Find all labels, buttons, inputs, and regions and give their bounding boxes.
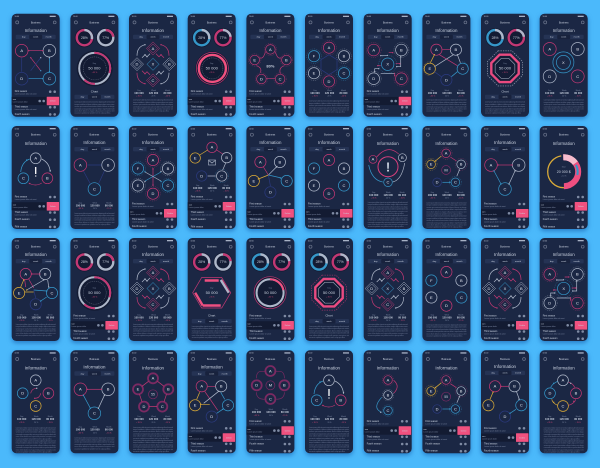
- pentagon diagram: D: [260, 76, 263, 81]
- phone row 3 column 1: star network: [12, 238, 60, 341]
- season list: [246, 420, 294, 453]
- donut chart: + 10 %: [561, 176, 567, 178]
- network diagram ABCD: [15, 44, 56, 85]
- phone row 1 column 7: circuit diagram: [364, 14, 412, 117]
- M cross diagram: [252, 366, 289, 404]
- pentagon with envelope: C: [220, 173, 223, 178]
- exclamation diagram: A: [372, 157, 375, 162]
- vertical chain diagram: C: [387, 408, 390, 413]
- phone row 4 column 2: triangle arrows: [70, 350, 118, 453]
- M cross diagram: M: [269, 383, 272, 388]
- statistics: [193, 184, 231, 192]
- triangle diagram: [74, 383, 114, 420]
- statistics: [310, 89, 348, 98]
- phone row 3 column 2: rings and big ring: [70, 238, 118, 341]
- phone row 4 column 1: ABCD cross: [12, 350, 60, 454]
- star diagram: [423, 44, 468, 86]
- pentagon with envelope: D: [200, 173, 203, 178]
- filled pentagon diagram: E: [137, 387, 140, 392]
- phone row 3 column 10: circuit diagram: [540, 238, 588, 341]
- pentagon diagram: E: [253, 57, 256, 62]
- season list: [422, 420, 470, 453]
- phone row 1 column 2: rings and big ring: [70, 14, 118, 117]
- phone row 3 column 5: rings and thick ring: [246, 238, 294, 341]
- octagon chart: [311, 275, 347, 310]
- circle diagram: X: [562, 60, 565, 65]
- phone row 4 column 5: M cross: [246, 350, 294, 453]
- statistics: [252, 408, 289, 417]
- pentagon with envelope: E: [194, 155, 197, 160]
- donut chart: [548, 156, 580, 188]
- chart footer: [192, 314, 232, 339]
- phone row 4 column 4: circuit pentagon: [188, 350, 236, 453]
- phone row 2 column 8: pentagon M: [422, 126, 470, 229]
- season list: [70, 314, 118, 340]
- percentage rings: [75, 28, 115, 47]
- M cross diagram: D: [255, 383, 258, 388]
- hexagon spoke diagram: [131, 153, 175, 201]
- network diagram ABCD: B: [48, 48, 51, 53]
- phone row 1 column 5: pentagon 80%: [246, 14, 294, 117]
- network diagram ABCD: C: [48, 76, 51, 81]
- filled pentagon diagram: D: [143, 404, 146, 409]
- circuit diagram: [542, 267, 585, 310]
- phone row 4 column 3: filled pentagon 55: [129, 350, 177, 453]
- filled pentagon diagram: 55: [151, 392, 155, 396]
- paragraph: [133, 323, 174, 337]
- filled pentagon diagram: B: [167, 387, 170, 392]
- paragraph: [426, 99, 467, 113]
- phone row 4 column 8: pentagon 55: [422, 350, 470, 453]
- statistics: [134, 415, 172, 424]
- big ring chart: [77, 50, 113, 86]
- vertical chain diagram: [377, 374, 397, 416]
- phone row 1 column 9: octagon chart: [481, 14, 529, 117]
- phone row 3 column 3: diamond network: [129, 238, 177, 341]
- network diagram ABCD: D: [20, 76, 23, 81]
- phone row 2 column 7: big exclamation circle: [364, 126, 412, 229]
- M cross diagram: A: [269, 368, 272, 373]
- filled pentagon diagram: [133, 373, 173, 412]
- cross diagram: [17, 375, 54, 411]
- paragraph: [309, 100, 350, 114]
- paragraph: [309, 426, 350, 453]
- pentagon diagram: C: [279, 76, 282, 81]
- cross diagram: D: [21, 391, 24, 396]
- cross diagram: B: [47, 391, 50, 396]
- big ring chart: [77, 275, 113, 311]
- octagon chart: [487, 51, 523, 86]
- exclamation diagram: C: [387, 180, 390, 185]
- filled pentagon diagram: C: [161, 404, 164, 409]
- circle diagram: C: [576, 74, 579, 79]
- filled pentagon diagram: A: [152, 376, 155, 381]
- paragraph: [426, 202, 467, 229]
- season list: [481, 202, 529, 228]
- circle diagram: D: [548, 74, 551, 79]
- phone row 2 column 5: hub star: [246, 126, 294, 229]
- paragraph: [368, 201, 408, 228]
- phone row 1 column 3: diamond network: [129, 14, 177, 117]
- hub diagram: [248, 156, 292, 198]
- statistics: [428, 191, 465, 200]
- circuit pentagon: [190, 381, 234, 422]
- season list: [129, 202, 177, 228]
- phone row 4 column 10: ABCD ring: [540, 350, 588, 454]
- statistics: [369, 191, 407, 200]
- diamond diagram: [130, 42, 176, 87]
- statistics: [76, 426, 113, 434]
- ABCD ring diagram: B: [575, 391, 578, 396]
- phone row 1 column 8: star diagram: [422, 14, 470, 117]
- paragraph: [133, 99, 174, 113]
- vertical chain diagram: B: [387, 392, 390, 397]
- phone row 1 column 1: ABCD network: [12, 14, 60, 117]
- phone row 2 column 1: exclamation cycle: [12, 126, 60, 229]
- phone row 2 column 9: triangle arrows: [481, 126, 529, 229]
- phone row 2 column 2: plain triangle: [70, 126, 118, 229]
- phone row 1 column 4: rings and pink ring: [188, 14, 236, 117]
- season list: [305, 202, 353, 228]
- pentagon with envelope: A: [211, 145, 214, 150]
- pentagon cycle: [483, 381, 527, 422]
- vertical chain diagram: A: [387, 377, 390, 382]
- cycle diagram: [311, 375, 346, 407]
- circle diagram: B: [576, 46, 579, 51]
- season list: [188, 427, 236, 452]
- donut chart: Start: [562, 166, 566, 168]
- ABCD ring diagram: A: [562, 378, 565, 383]
- phone row 2 column 6: plain hexagon: [305, 126, 353, 229]
- season list: [481, 427, 529, 452]
- percentage rings: [251, 252, 291, 272]
- hexagon circles: [308, 154, 350, 199]
- pink ring chart: [195, 51, 229, 85]
- phone row 2 column 10: donut chart: [540, 126, 588, 229]
- star network: [14, 268, 58, 310]
- pentagon diagram: [248, 43, 293, 85]
- diamond diagram: [482, 266, 528, 311]
- ABCD ring diagram: [545, 375, 581, 411]
- circle diagram: [543, 42, 584, 83]
- donut chart: 20 000 $: [557, 170, 571, 174]
- season list: [12, 196, 60, 228]
- cross diagram: C: [34, 403, 37, 408]
- season list: [246, 314, 294, 340]
- season list: [364, 420, 412, 453]
- statistics: [369, 313, 407, 322]
- circuit diagram: [366, 42, 409, 86]
- statistics: [545, 89, 583, 98]
- pentagon with envelope: B: [225, 155, 228, 160]
- season list: [246, 90, 294, 116]
- chart footer: [485, 89, 526, 115]
- M cross diagram: B: [283, 383, 286, 388]
- phone row 4 column 6: exclamation cycle: [305, 350, 353, 453]
- pentagon diagram: B: [285, 57, 288, 62]
- phone row 4 column 7: vertical chain: [364, 350, 412, 453]
- paragraph: [133, 426, 174, 453]
- statistics: [17, 415, 55, 424]
- paragraph: [16, 323, 56, 337]
- pentagon diagram: A: [269, 47, 272, 52]
- paragraph: [16, 426, 56, 454]
- season list: [481, 314, 529, 340]
- season list: [188, 90, 236, 116]
- percentage rings: [485, 28, 526, 47]
- statistics: [134, 89, 172, 98]
- paragraph: [544, 426, 584, 454]
- statistics: [17, 313, 55, 322]
- season list: [364, 90, 412, 116]
- pentagon diagram: 80%: [266, 64, 275, 69]
- phone row 3 column 7: diamond network: [364, 238, 412, 341]
- statistics: [428, 313, 465, 322]
- exclamation diagram: [369, 150, 406, 187]
- season list: [188, 196, 236, 228]
- phone row 1 column 10: four circles and X: [540, 14, 588, 117]
- percentage rings: [75, 252, 115, 272]
- phone row 4 column 9: pentagon cycle: [481, 350, 529, 453]
- thick ring chart: [254, 277, 286, 309]
- season list: [12, 90, 60, 116]
- triangle diagram: [485, 159, 525, 195]
- percentage rings: [192, 252, 233, 272]
- paragraph: [426, 324, 467, 338]
- diamond diagram: [130, 266, 176, 311]
- season list: [540, 196, 588, 228]
- exclamation diagram: !: [386, 160, 390, 174]
- ABCD ring diagram: C: [562, 403, 565, 408]
- percentage rings: [309, 252, 350, 272]
- paragraph: [544, 99, 584, 113]
- pentagon with envelope: [190, 142, 232, 183]
- statistics: [545, 415, 583, 424]
- hexagon circles: [426, 266, 467, 311]
- percentage rings: [192, 28, 233, 47]
- statistics: [310, 415, 348, 424]
- ABCD ring diagram: D: [549, 391, 552, 396]
- phone row 2 column 4: envelope pentagon: [188, 126, 236, 229]
- phone row 3 column 9: diamond network: [481, 238, 529, 341]
- phone row 3 column 6: rings and octagon: [305, 238, 353, 341]
- M cross diagram: C: [269, 396, 272, 401]
- exclamation diagram: B: [401, 155, 404, 160]
- phone row 2 column 3: hexagon spokes: [129, 126, 177, 229]
- season list: [540, 314, 588, 340]
- paragraph: [368, 323, 408, 337]
- diamond diagram: [365, 266, 410, 311]
- hexagon chart: [193, 278, 231, 308]
- season list: [246, 202, 294, 228]
- statistics: [428, 89, 465, 98]
- phone row 1 column 6: hexagon dashed: [305, 14, 353, 117]
- cross diagram: A: [34, 378, 37, 383]
- paragraph: [74, 436, 115, 450]
- cycle diagram: [18, 153, 53, 185]
- pentagon diagram: M: [444, 167, 448, 172]
- hexagon diagram: [307, 40, 351, 89]
- network diagram ABCD: A: [20, 48, 23, 53]
- pentagon diagram: 55: [444, 395, 448, 399]
- triangle diagram: [74, 159, 114, 195]
- phone row 3 column 4: rings and hexagon: [188, 238, 236, 341]
- statistics: [134, 313, 172, 322]
- chart footer: [74, 89, 115, 115]
- paragraph: [74, 212, 115, 226]
- statistics: [76, 201, 113, 210]
- chart footer: [309, 314, 350, 339]
- phone row 3 column 8: hexagon circles: [422, 238, 470, 341]
- circle diagram: A: [548, 46, 551, 51]
